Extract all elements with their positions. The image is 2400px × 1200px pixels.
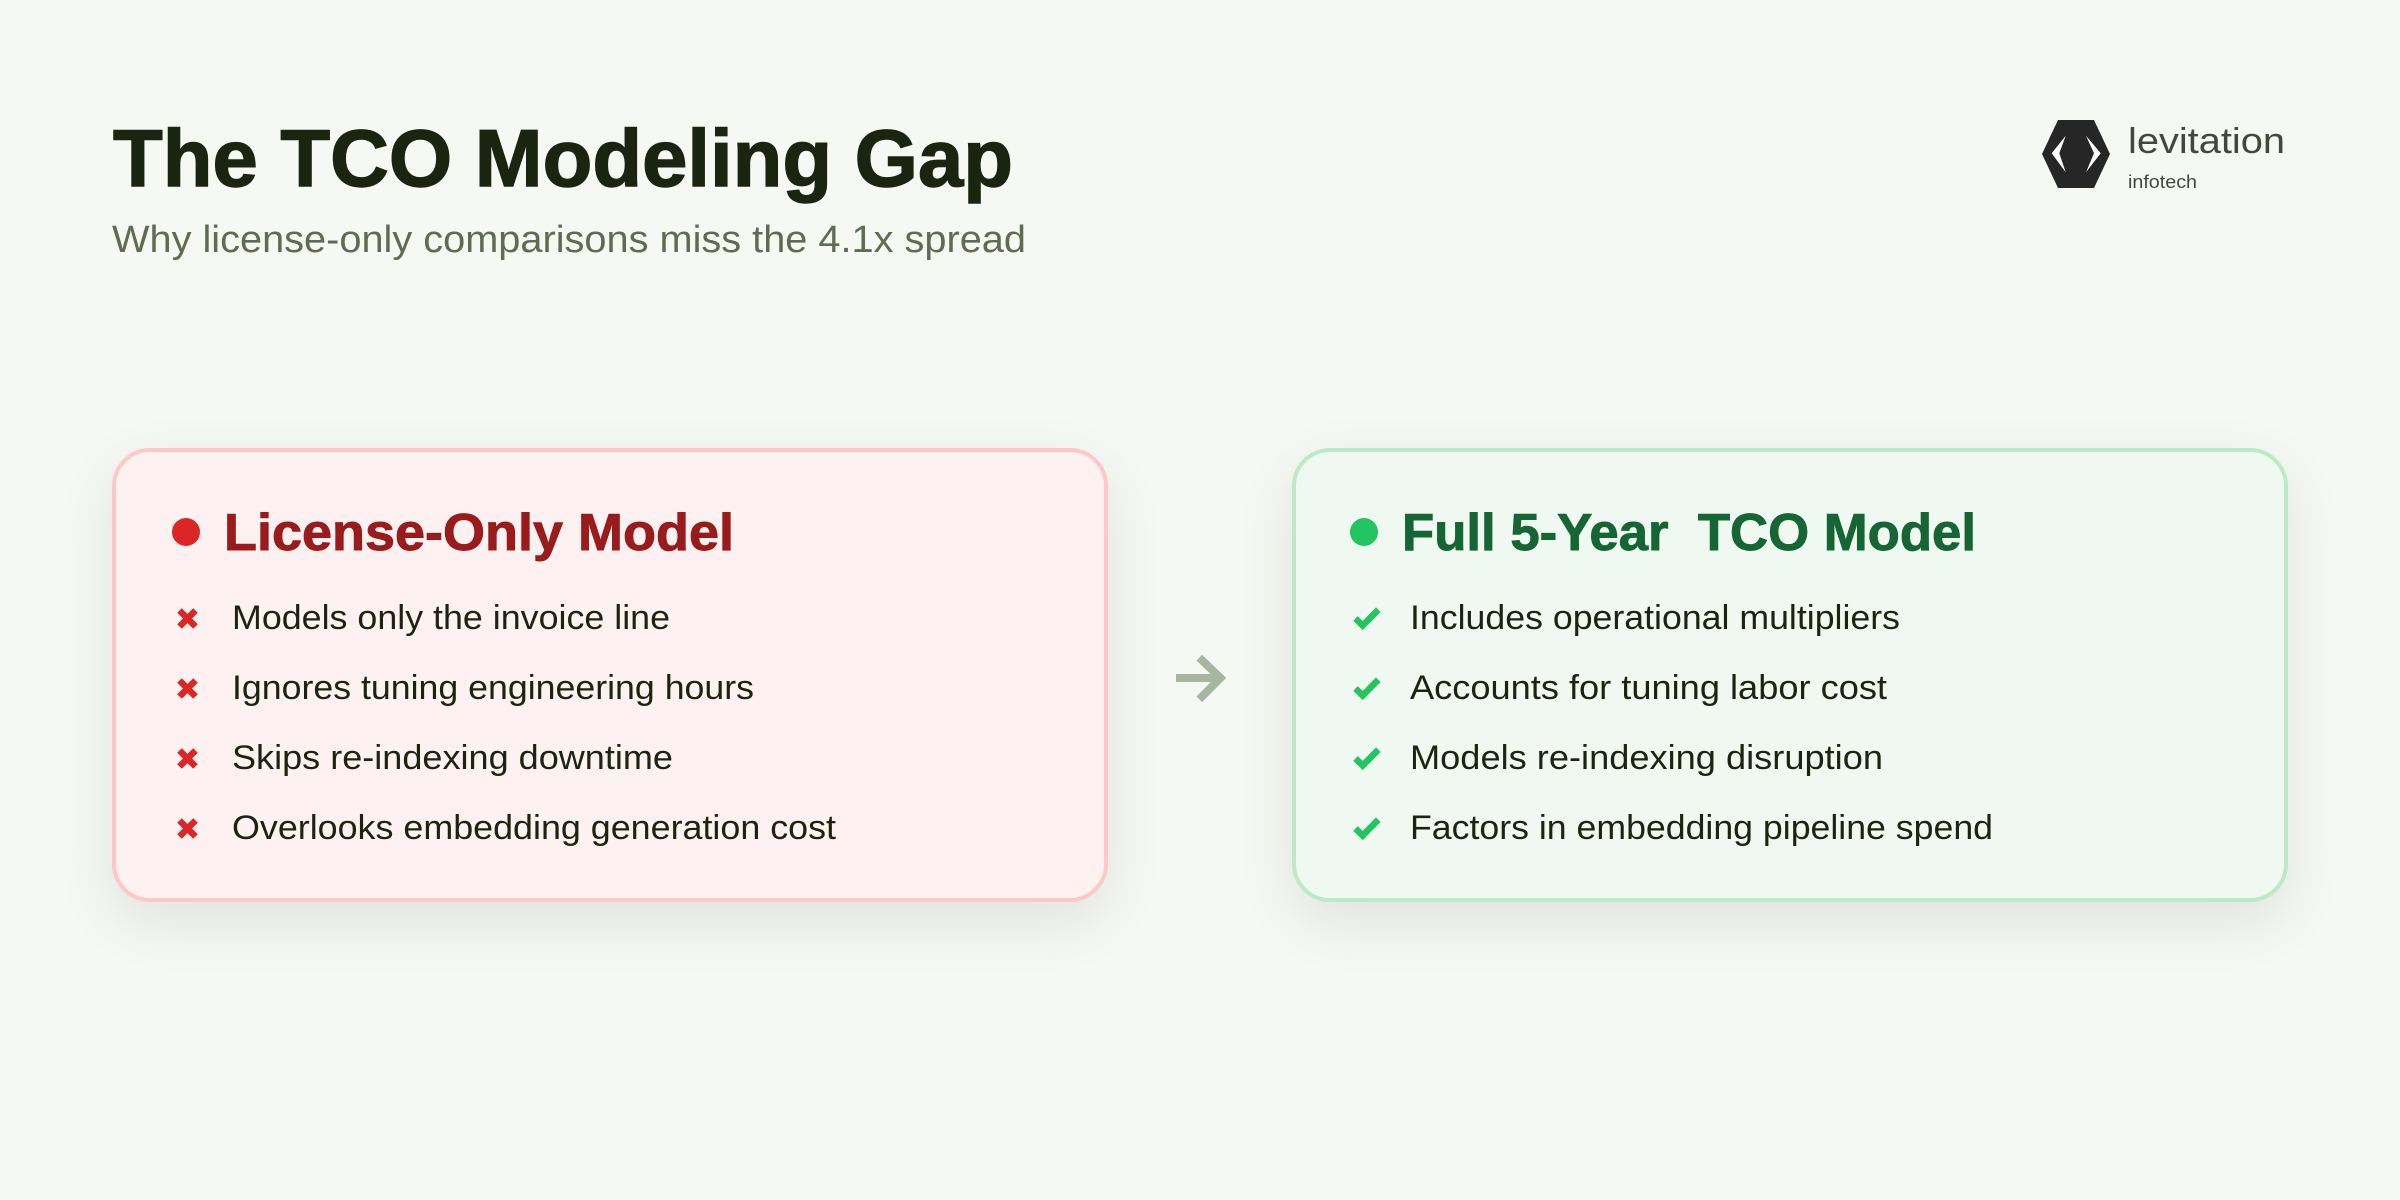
logo: levitation infotech [2042, 120, 2285, 192]
arrow [1176, 654, 1226, 702]
panel: license-only model [112, 448, 1108, 902]
title: The TCO Modeling Gap [113, 114, 1013, 204]
icon: hexagon with chevrons [2042, 120, 2110, 188]
panel: full 5-year TCO model [1292, 448, 2288, 902]
item: tuning hours: Ignores tuning engineering hours [232, 669, 754, 707]
item: invoice line: Models only the invoice line [232, 599, 670, 637]
item: embedding cost: Overlooks embedding generation cost [232, 809, 837, 847]
item: tuning labor: Accounts for tuning labor cost [1410, 669, 1888, 707]
item: re-indexing disruption: Models re-indexing disruption [1410, 739, 1883, 777]
logo subline: infotech [2128, 172, 2197, 192]
item: embedding pipeline: Factors in embedding pipeline spend [1410, 809, 1993, 847]
logo wordmark: levitation [2128, 120, 2285, 161]
item: operational multipliers: Includes operational multipliers [1410, 599, 1900, 637]
item: re-indexing downtime: Skips re-indexing downtime [232, 739, 673, 777]
subtitle: Why license-only comparisons miss the 4.1x spread [112, 219, 1026, 261]
heading: full 5-year TCO model: Full 5-Year TCO Model [1402, 504, 1976, 562]
heading: license-only model: License-Only Model [224, 504, 734, 562]
header: title and subtitle [112, 114, 1026, 261]
